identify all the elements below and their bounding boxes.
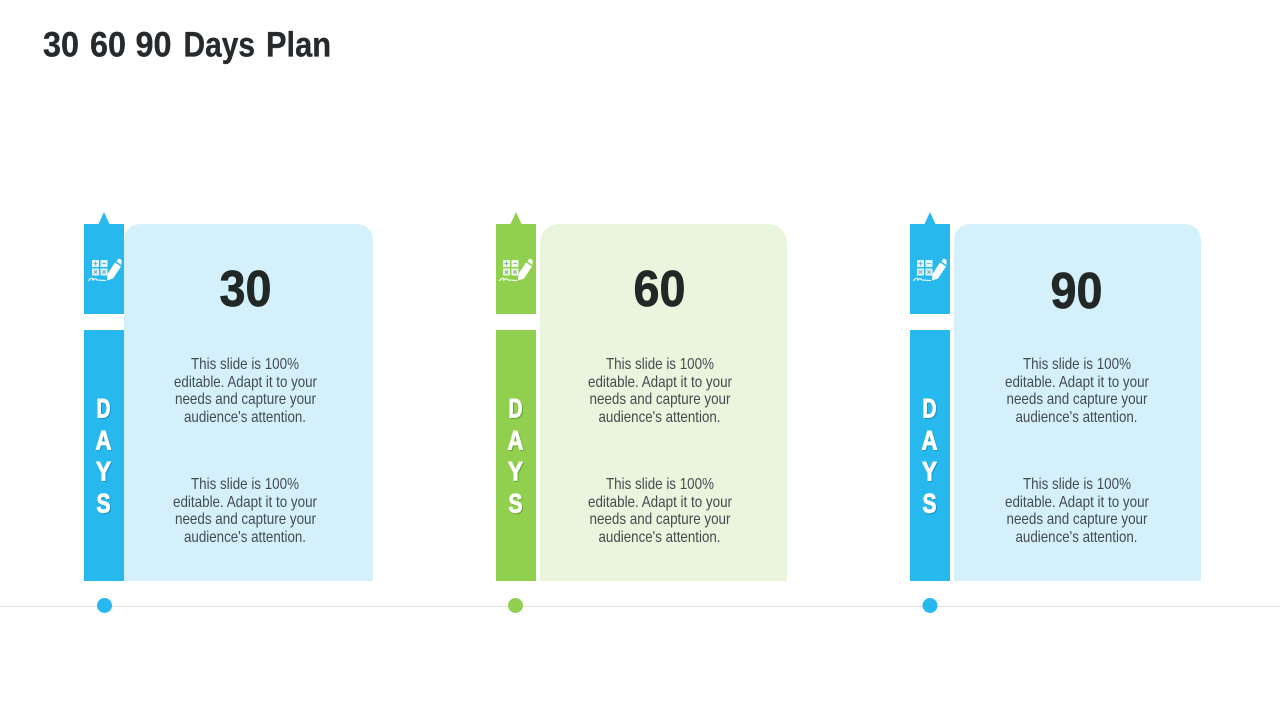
- number: 90: 90: [1050, 262, 1102, 319]
- text block: 90 lower: audience's attention.: [1016, 529, 1138, 546]
- days bar: 90: D: [924, 394, 938, 424]
- days bar: 30: [84, 330, 124, 581]
- icon tab: 30: [84, 212, 124, 314]
- card background: 30: [124, 224, 373, 581]
- timeline dot: 90: [922, 598, 938, 613]
- title: 60: [90, 24, 126, 64]
- panel: 60 days: [496, 212, 787, 613]
- days bar: 90: D: [922, 394, 936, 424]
- text block: 90 lower: editable. Adapt it to your: [1005, 494, 1150, 511]
- text block: 90 upper: editable. Adapt it to your: [1005, 374, 1150, 391]
- icon tab: 90: [910, 212, 950, 314]
- timeline line: [0, 606, 1280, 607]
- text block: 60 upper: [588, 356, 733, 426]
- text block: 30 lower: editable. Adapt it to your: [173, 494, 318, 511]
- days bar: 90: Y: [923, 458, 938, 488]
- text block: 30 lower: [173, 476, 318, 546]
- title: 90: [136, 24, 172, 64]
- card background: 60: [540, 224, 787, 581]
- text block: 30 upper: audience's attention.: [184, 409, 306, 426]
- text block: 60 upper: This slide is 100%: [606, 356, 714, 373]
- days bar: 30: A: [96, 426, 112, 456]
- days bar: 60: S: [510, 490, 524, 520]
- text block: 30 upper: This slide is 100%: [191, 356, 299, 373]
- days bar: 30: S: [98, 490, 112, 520]
- text block: 60 upper: audience's attention.: [598, 409, 720, 426]
- days bar: 90: Y: [922, 456, 937, 486]
- icon tab: 60: [496, 212, 536, 314]
- text block: 60 upper: needs and capture your: [590, 391, 731, 408]
- days bar: 90: S: [924, 490, 938, 520]
- text block: 60 lower: audience's attention.: [598, 529, 720, 546]
- text block: 90 upper: This slide is 100%: [1023, 356, 1131, 373]
- days bar: 30: Y: [97, 458, 112, 488]
- days bar: 30: D: [96, 394, 110, 424]
- days bar: 60: S: [508, 488, 522, 518]
- text block: 60 lower: [588, 476, 733, 546]
- title: Plan: [266, 24, 331, 64]
- text block: 90 lower: This slide is 100%: [1023, 476, 1131, 493]
- text block: 60 lower: This slide is 100%: [606, 476, 714, 493]
- title: 30: [43, 24, 79, 64]
- card background: 90: [954, 224, 1201, 581]
- title: Days: [184, 24, 255, 64]
- text block: 30 upper: editable. Adapt it to your: [174, 374, 318, 391]
- timeline dot: 30: [97, 598, 112, 613]
- days bar: 60: A: [508, 426, 524, 456]
- timeline dot: 60: [508, 598, 523, 613]
- text block: 30 upper: [174, 356, 318, 426]
- text block: 60 lower: needs and capture your: [590, 511, 731, 528]
- number: 30: 30: [220, 260, 272, 317]
- text block: 30 lower: audience's attention.: [184, 529, 306, 546]
- text block: 60 lower: editable. Adapt it to your: [588, 494, 733, 511]
- text block: 90 lower: needs and capture your: [1006, 511, 1148, 528]
- days bar: 90: A: [922, 426, 938, 456]
- days bar: 30: D: [98, 394, 112, 424]
- text block: 90 upper: audience's attention.: [1016, 409, 1138, 426]
- text block: 30 upper: needs and capture your: [175, 391, 317, 408]
- days bar: 60: Y: [509, 458, 524, 488]
- days bar: 90: A: [922, 426, 938, 456]
- text block: 90 upper: [1005, 356, 1150, 426]
- text block: 30 lower: needs and capture your: [175, 511, 317, 528]
- days bar: 60: A: [508, 426, 524, 456]
- days bar: 30: A: [96, 426, 112, 456]
- days bar: 90: [910, 330, 950, 581]
- days bar: 30: S: [96, 488, 110, 518]
- days bar: 60: D: [508, 394, 522, 424]
- text block: 30 lower: This slide is 100%: [191, 476, 299, 493]
- days bar: 60: D: [510, 394, 524, 424]
- days bar: 60: Y: [508, 456, 523, 486]
- days bar: 90: S: [922, 488, 936, 518]
- days bar: 30: Y: [96, 456, 111, 486]
- panel: 30 days: [84, 212, 373, 613]
- title: [43, 24, 331, 64]
- text block: 90 upper: needs and capture your: [1006, 391, 1148, 408]
- panel: 90 days: [910, 212, 1201, 613]
- number: 60: 60: [634, 260, 686, 317]
- days bar: 60: [496, 330, 536, 581]
- text block: 90 lower: [1005, 476, 1150, 546]
- text block: 60 upper: editable. Adapt it to your: [588, 374, 733, 391]
